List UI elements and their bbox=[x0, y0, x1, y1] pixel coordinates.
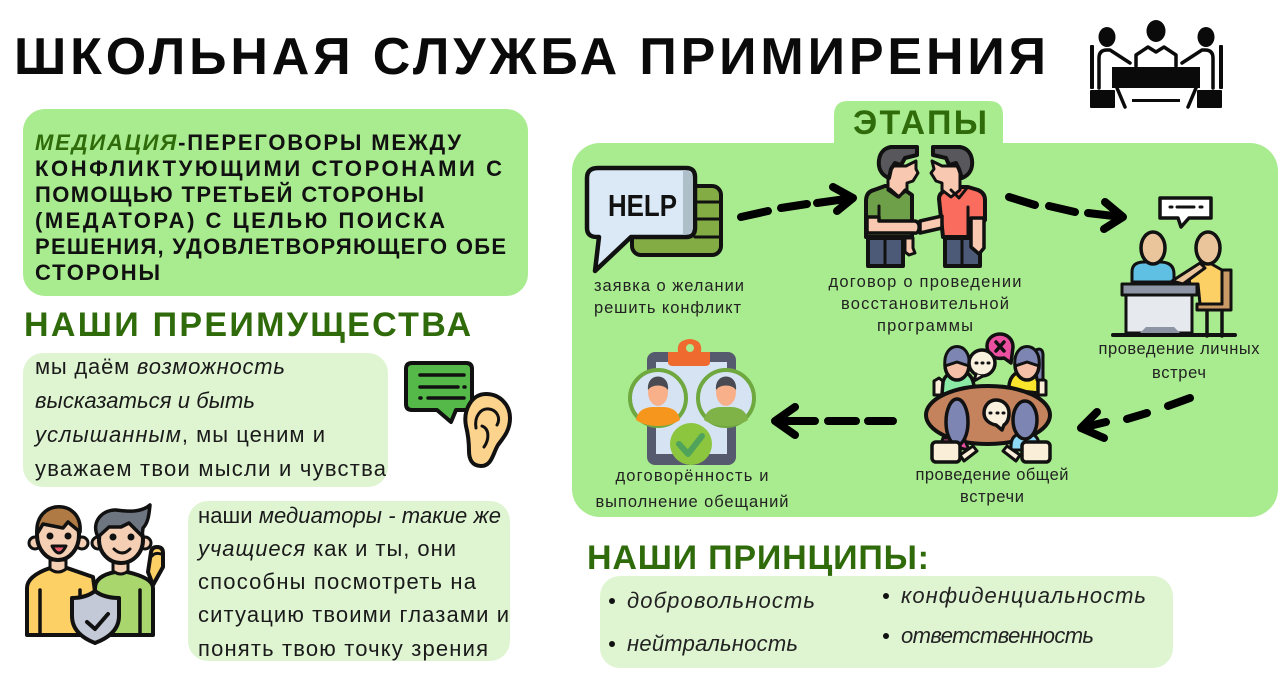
definition text: КОНФЛИКТУЮЩИМИ СТОРОНАМИ С bbox=[35, 156, 502, 181]
label: request: решить конфликт bbox=[594, 299, 741, 317]
label: agreement: восстановительной bbox=[841, 295, 1009, 313]
principles list: ответственность bbox=[901, 623, 1094, 648]
principles list: конфиденциальность bbox=[901, 583, 1146, 608]
icon: meeting at a table bbox=[1090, 20, 1223, 108]
label: joint meeting: проведение общей bbox=[916, 466, 1068, 484]
heading: our principles: НАШИ ПРИНЦИПЫ: bbox=[587, 539, 929, 577]
label: agreement bbox=[828, 273, 1022, 335]
icon: two students with shield bbox=[27, 505, 163, 643]
icon: personal meetings bbox=[1113, 198, 1235, 336]
label: personal meetings bbox=[1098, 340, 1260, 382]
icon: help request: HELP bbox=[608, 188, 677, 223]
label: joint meeting: встречи bbox=[960, 488, 1024, 506]
definition text bbox=[35, 130, 506, 285]
arrow: personal meetings to joint meeting bbox=[1081, 398, 1190, 438]
icon: speech bubble and ear bbox=[406, 363, 510, 466]
advantage two text bbox=[196, 503, 509, 661]
panel: advantage one bbox=[23, 353, 388, 487]
principles list bbox=[627, 583, 1146, 656]
advantage one text bbox=[33, 354, 387, 481]
panel: definition of mediation bbox=[23, 109, 528, 296]
heading: our advantages: НАШИ ПРЕИМУЩЕСТВА bbox=[24, 306, 471, 344]
advantage two text: наши медиаторы - такие же bbox=[198, 503, 501, 528]
panel: stages bbox=[572, 101, 1278, 517]
label: request: заявка о желании bbox=[594, 277, 744, 295]
arrow: joint meeting to agreement bbox=[775, 407, 893, 435]
advantage one text: высказаться и быть bbox=[35, 388, 255, 413]
label: agreement and promises: выполнение обещаний bbox=[596, 493, 788, 511]
label: agreement and promises: договорённость и bbox=[616, 467, 768, 485]
stages heading: ЭТАПЫ bbox=[853, 104, 987, 142]
principles list: добровольность bbox=[627, 588, 815, 613]
label: personal meetings: встреч bbox=[1152, 364, 1206, 382]
title: ШКОЛЬНАЯ СЛУЖБА ПРИМИРЕНИЯ bbox=[14, 28, 1046, 86]
definition text: СТОРОНЫ bbox=[35, 260, 160, 285]
icon: clipboard with two portraits bbox=[630, 339, 754, 465]
definition text: МЕДИАЦИЯ-ПЕРЕГОВОРЫ МЕЖДУ bbox=[35, 130, 461, 155]
panel: principles bbox=[600, 576, 1173, 668]
label: personal meetings: проведение личных bbox=[1098, 340, 1260, 358]
advantage one text: услышанным, мы ценим и bbox=[33, 422, 325, 447]
principle bullets bbox=[609, 593, 889, 647]
icon: two people shaking hands bbox=[866, 147, 985, 266]
definition text: (МЕДАТОРА) С ЦЕЛЬЮ ПОИСКА bbox=[35, 208, 445, 233]
arrow: request to agreement bbox=[741, 187, 853, 217]
advantage one text: уважаем твои мысли и чувства bbox=[35, 456, 387, 481]
advantage two text: ситуацию твоими глазами и bbox=[198, 602, 509, 627]
panel: advantage two bbox=[188, 501, 510, 661]
advantage two text: способны посмотреть на bbox=[198, 569, 477, 594]
advantage two text: учащиеся как и ты, они bbox=[196, 536, 456, 561]
definition text: ПОМОЩЬЮ ТРЕТЬЕЙ СТОРОНЫ bbox=[35, 182, 424, 207]
advantage one text: мы даём возможность bbox=[35, 354, 285, 379]
label: agreement and promises bbox=[596, 467, 788, 511]
label: agreement: программы bbox=[877, 317, 973, 335]
label: request bbox=[594, 277, 744, 317]
advantage two text: понять твою точку зрения bbox=[198, 636, 488, 661]
icon: joint meeting bbox=[926, 334, 1050, 462]
label: agreement: договор о проведении bbox=[828, 273, 1022, 291]
icon: help request bbox=[587, 168, 721, 271]
arrow: agreement to personal meetings bbox=[1009, 197, 1123, 229]
stages tab bbox=[834, 101, 1003, 145]
definition text: РЕШЕНИЯ, УДОВЛЕТВОРЯЮЩЕГО ОБЕ bbox=[35, 234, 506, 259]
label: joint meeting bbox=[916, 466, 1068, 506]
principles list: нейтральность bbox=[627, 631, 798, 656]
